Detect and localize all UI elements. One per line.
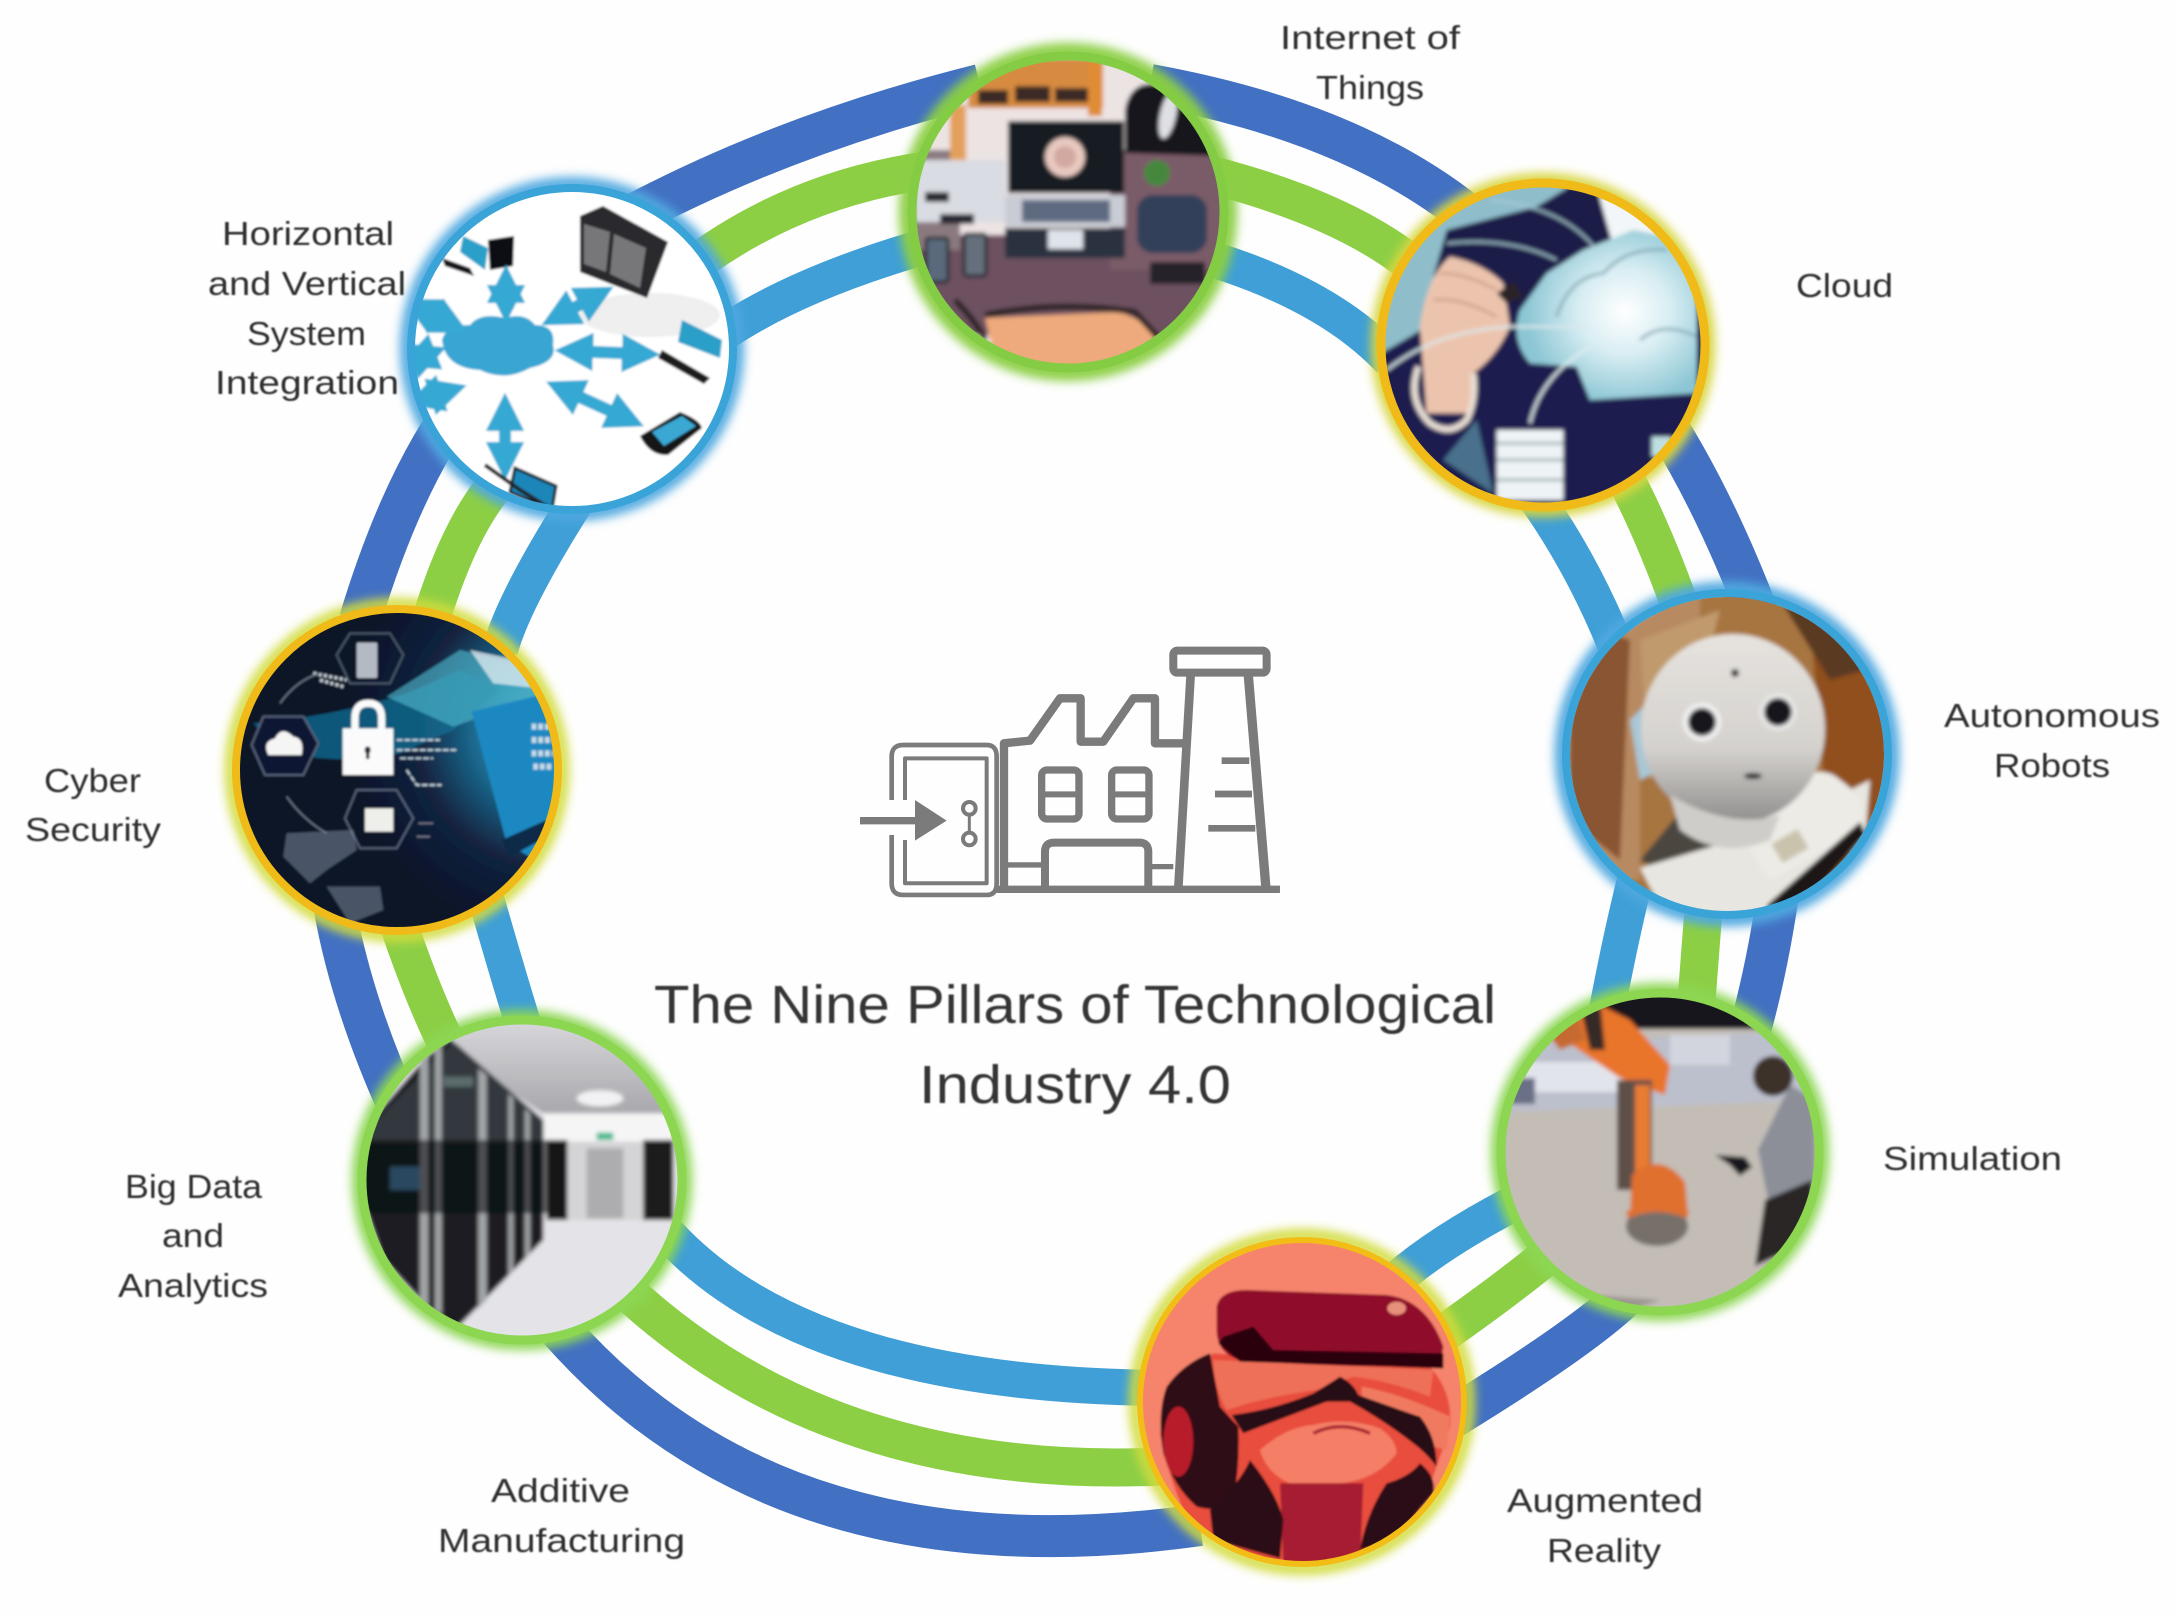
photo: hand and cloud bbox=[1386, 188, 1700, 502]
pillar: Big Data photo bbox=[350, 1013, 697, 1350]
ring: outer blue bbox=[335, 85, 1780, 1536]
ring yellow bbox=[1381, 183, 1705, 507]
glow ring green bbox=[359, 1017, 685, 1343]
label: Horizontal and Vertical System Integration: and Vertical bbox=[208, 265, 406, 302]
ring green bbox=[912, 56, 1224, 368]
label: Additive Manufacturing: Additive bbox=[491, 1472, 630, 1509]
label: Cyber Security: Cyber bbox=[44, 762, 141, 799]
label: Big Data and Analytics bbox=[118, 1168, 268, 1304]
label: Horizontal and Vertical System Integration: Horizontal bbox=[222, 215, 394, 252]
pillar: Autonomous Robots photo bbox=[1560, 589, 1900, 925]
label: Horizontal and Vertical System Integration bbox=[208, 215, 406, 401]
pillar: Cyber Security photo bbox=[230, 600, 570, 940]
label: Horizontal and Vertical System Integration: System bbox=[247, 315, 366, 352]
ring blue bbox=[411, 188, 733, 510]
pillar: Internet of Things photo bbox=[900, 40, 1240, 390]
title: Industry 4.0 bbox=[919, 1055, 1231, 1115]
ring green bbox=[1501, 993, 1819, 1311]
label: Internet of Things: Internet of bbox=[1280, 19, 1461, 56]
pillar: Horizontal and Vertical System Integration photo bbox=[405, 180, 745, 520]
label: Horizontal and Vertical System Integration: Integration bbox=[215, 364, 399, 401]
label: Cyber Security bbox=[25, 762, 162, 848]
label: Internet of Things: Things bbox=[1316, 69, 1424, 106]
photo: orange robot arm and person bbox=[1506, 998, 1814, 1306]
glow ring green bbox=[1498, 990, 1822, 1314]
label: Simulation: Simulation bbox=[1883, 1140, 2062, 1177]
label: Additive Manufacturing: Manufacturing bbox=[438, 1522, 685, 1559]
ring green bbox=[362, 1020, 682, 1340]
label: Augmented Reality bbox=[1507, 1482, 1703, 1569]
pillar: Augmented Reality photo bbox=[1133, 1233, 1470, 1570]
label: Augmented Reality: Augmented bbox=[1507, 1482, 1703, 1519]
ring blue bbox=[1566, 593, 1888, 915]
ring yellow bbox=[236, 609, 558, 931]
label: Augmented Reality: Reality bbox=[1547, 1532, 1662, 1569]
photo: data center bbox=[366, 1024, 678, 1336]
glow ring green bbox=[907, 51, 1229, 373]
photo: white robot bbox=[1570, 597, 1884, 911]
title: The Nine Pillars of Technological bbox=[654, 975, 1496, 1035]
photo: padlock and laptop bbox=[240, 613, 554, 927]
icon: smart factory bbox=[860, 651, 1280, 895]
glow ring blue bbox=[1562, 589, 1892, 919]
photo: desk with laptop bbox=[916, 60, 1220, 364]
label: Additive Manufacturing bbox=[438, 1472, 685, 1559]
glow ring yellow bbox=[1378, 180, 1708, 510]
glow ring blue bbox=[407, 184, 737, 514]
ring: inner light blue bbox=[485, 245, 1635, 1388]
label: Autonomous Robots bbox=[1944, 697, 2160, 784]
label: Cloud: Cloud bbox=[1796, 267, 1893, 304]
glow ring yellow bbox=[231, 604, 563, 936]
label: Autonomous Robots: Autonomous bbox=[1944, 697, 2160, 734]
label: Big Data and Analytics: and bbox=[162, 1217, 224, 1254]
label: Autonomous Robots: Robots bbox=[1994, 747, 2110, 784]
label: Internet of Things bbox=[1280, 19, 1461, 106]
label: Cyber Security: Security bbox=[25, 811, 162, 848]
photo: VR headset bbox=[1143, 1243, 1461, 1561]
glow ring yellow bbox=[1135, 1235, 1469, 1569]
pillar: Cloud photo bbox=[1370, 177, 1713, 517]
ring: middle green bbox=[392, 165, 1705, 1468]
photo: cloud network diagram bbox=[415, 192, 729, 506]
ring yellow bbox=[1140, 1240, 1464, 1564]
pillar: Simulation photo bbox=[1495, 985, 1825, 1320]
title bbox=[654, 975, 1496, 1115]
label: Big Data and Analytics: Big Data bbox=[125, 1168, 263, 1205]
label: Big Data and Analytics: Analytics bbox=[118, 1267, 268, 1304]
